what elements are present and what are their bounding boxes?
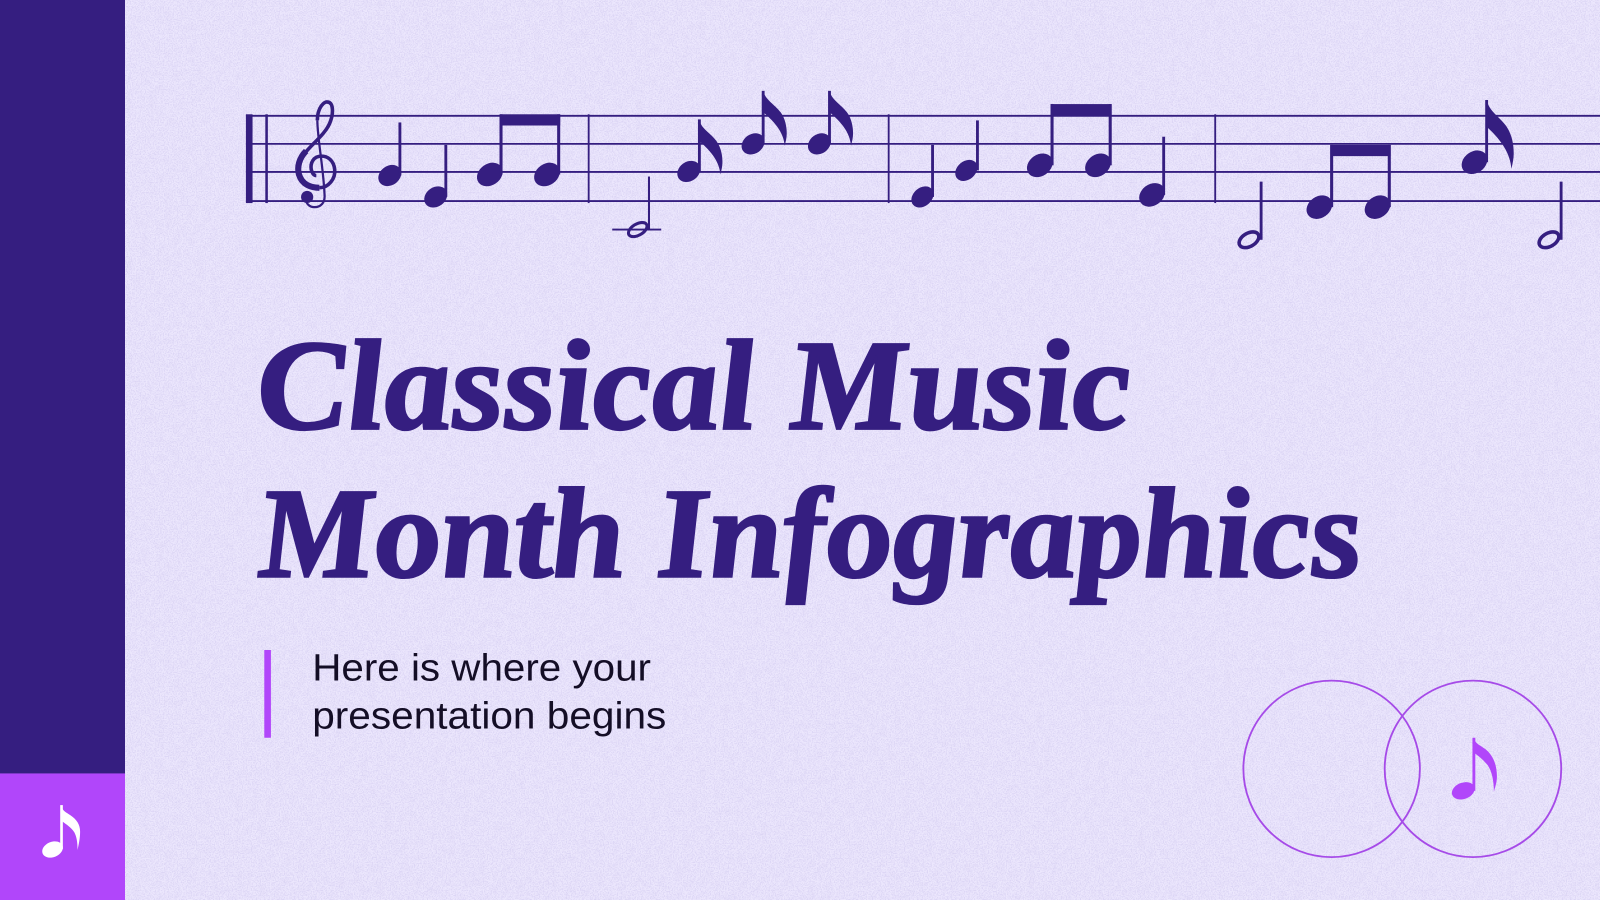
icon: purple music note (1449, 738, 1497, 803)
subtitle: Here is where your (312, 647, 651, 689)
measure bars (588, 114, 1216, 203)
measure 4 notes (1236, 100, 1563, 251)
treble clef (298, 102, 335, 207)
measure 2 notes (612, 91, 853, 240)
sidebar (0, 0, 125, 900)
icon: white music note (40, 805, 80, 861)
overlapping circles with note (1243, 681, 1561, 857)
opening double bar (246, 114, 268, 203)
measure 1 notes (374, 114, 564, 212)
accent bar (264, 650, 271, 738)
title: Month Infographics (250, 462, 1366, 604)
title: Classical Music (252, 314, 1136, 457)
measure 3 notes (907, 104, 1169, 212)
staff lines (246, 116, 1600, 201)
music staff (246, 91, 1600, 251)
subtitle: presentation begins (312, 695, 666, 737)
subtitle (312, 647, 666, 737)
title (250, 314, 1366, 604)
